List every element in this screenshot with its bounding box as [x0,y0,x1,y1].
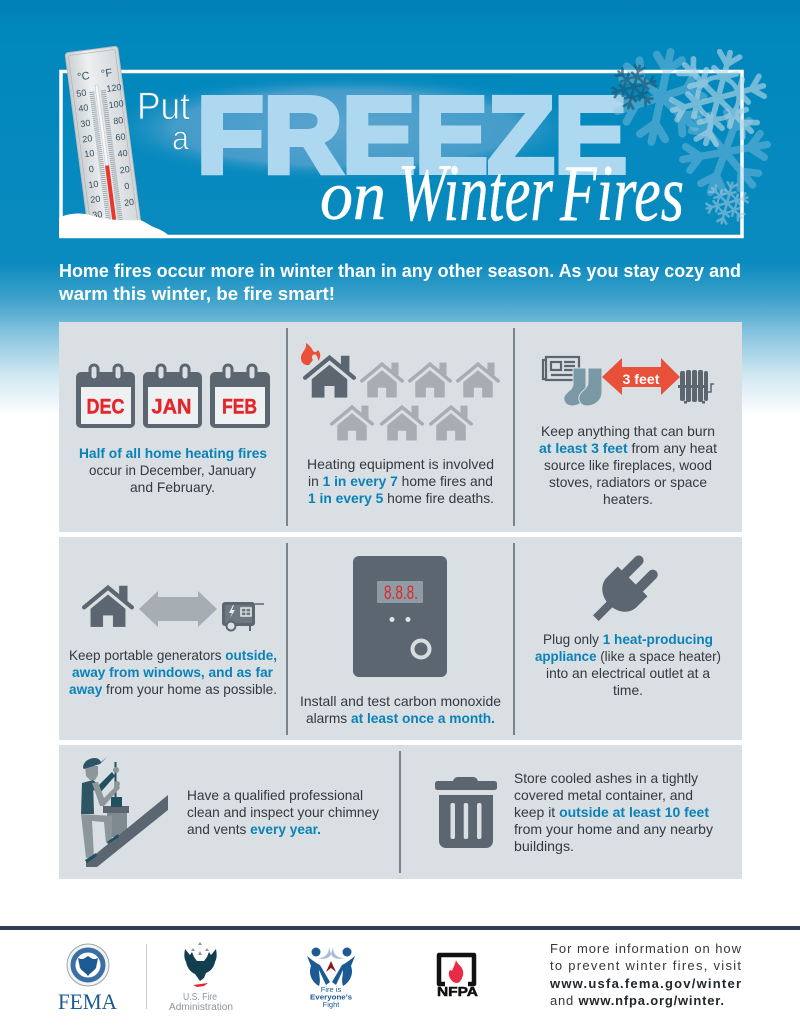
text: CO alarms: alarms at least once a month. [306,710,495,726]
text: plug: Plug only 1 heat-producing [543,631,713,647]
text: generators: Keep portable generators outside, [69,647,277,663]
logo: FEMA: FEMA [58,989,117,1014]
icon: calendars [76,365,270,428]
title: Put a: Put [137,86,190,128]
legs [81,814,112,858]
logo: U.S. Fire Administration: Administration [169,1002,233,1013]
title: Put a [137,86,190,158]
brush [114,762,116,802]
logo: FEMA [58,944,117,1014]
logo: Fire is Everyone's Fight: Everyone's [310,992,352,1002]
icon: calendars: FEB [222,396,257,418]
icon: calendars: DEC [86,396,124,418]
icon: thermometer: 20 [123,197,135,208]
text: ashes: Store cooled ashes in a tightly [514,770,698,786]
icon: snowflakes [606,41,780,229]
icon: radiator [678,370,714,404]
icon: thermometer: 0 [88,164,95,174]
intro text: Home fires occur more in winter than in any other season. As you stay cozy and [59,261,741,281]
icon: thermometer: 80 [113,115,124,126]
text: chimney: clean and inspect your chimney [187,804,379,820]
text: keep 3 feet: Keep anything that can burn [541,423,715,439]
text: heating fires [79,445,267,495]
arrow: 3 feet: 3 feet [622,372,660,387]
icon: thermometer: 40 [117,148,128,159]
intro text: warm this winter, be fire smart! [58,284,335,304]
icon: trash can [435,777,497,848]
chimney [107,813,127,837]
logo: Fire is Everyone's Fight: Fight [323,1000,340,1009]
arrow: distance [139,591,217,627]
text: CO alarms [300,693,501,726]
icon: thermometer: 100 [108,98,124,110]
text: heating fires: occur in December, January [89,462,256,478]
icon: thermometer [59,46,168,238]
head [85,766,98,780]
icon: thermometer: 30 [92,209,103,220]
text: keep 3 feet [539,423,717,507]
text: more information: to prevent winter fires, visit [550,958,741,973]
icon: thermometer: 20 [82,133,93,144]
text: CO alarms: Install and test carbon monoxide [300,693,501,709]
arrow: 3 feet [602,358,680,395]
text: plug [535,631,721,698]
icon: thermometer: 20 [90,194,101,205]
panel: row 3 [59,745,742,879]
text: generators: away from your home as possible. [69,681,277,697]
text: keep 3 feet: source like fireplaces, wood [544,457,712,473]
title banner [61,72,742,238]
title glow [100,74,590,182]
icon: CO alarm: 8.8.8. [384,583,418,604]
text: plug: time. [613,682,643,698]
icon: plug [581,550,664,633]
torso [81,780,94,814]
text: ashes [514,770,713,854]
text: more information: www.usfa.fema.gov/winter [549,976,741,991]
arms [93,772,115,793]
text: chimney [187,787,379,837]
text: ashes: keep it outside at least 10 feet [514,804,709,820]
snow [59,214,168,238]
text: ashes: buildings. [514,838,574,854]
text: heating equipment: Heating equipment is involved [307,456,494,472]
icon: thermometer: 20 [119,164,130,175]
roof [86,795,168,867]
logo: U.S. Fire Administration [169,942,233,1013]
icon: CO alarm [353,556,447,677]
logo: U.S. Fire Administration: U.S. Fire [183,992,217,1003]
title: on Winter Fires: on [320,158,386,235]
text: chimney: Have a qualified professional [187,787,363,803]
icon: chimney sweep [81,757,168,867]
title: Put a: a [172,120,189,158]
title: FREEZE: FREEZE [197,74,627,195]
title: on Winter Fires: Winter [398,147,554,238]
text: more information: and www.nfpa.org/winter. [550,993,724,1008]
text: keep 3 feet: stoves, radiators or space [549,474,707,490]
icon: thermometer: 60 [115,131,126,143]
title: on Winter Fires: Fires [559,150,684,238]
intro text [58,261,741,304]
panel: row 1 [59,322,742,532]
icon: thermometer: 0 [124,181,130,191]
logo: Fire is Everyone's Fight [307,947,355,1009]
text: heating fires: Half of all home heating fires [79,445,267,461]
text: heating equipment: 1 in every 5 home fire deaths. [308,490,494,506]
background gradient [0,0,800,416]
icon: house [84,586,132,627]
text: chimney: and vents every year. [187,821,321,837]
icon: thermometer: 30 [80,118,91,129]
text: heating equipment: in 1 in every 7 home fires and [308,473,493,489]
icon: thermometer: 120 [106,82,122,94]
title frame [61,72,742,236]
text: plug: appliance (like a space heater) [535,648,721,664]
text: ashes: from your home and any nearby [514,821,713,837]
text: keep 3 feet: heaters. [603,491,653,507]
icon: thermometer: 10 [88,179,99,190]
text: ashes: covered metal container, and [514,787,693,803]
title: on Winter Fires [320,147,684,238]
tube [95,85,117,230]
icon: thermometer: 10 [84,148,95,159]
text: plug: into an electrical outlet at a [546,665,710,681]
text: generators [69,647,277,697]
logo: NFPA [437,955,478,999]
text: generators: away from windows, and as far [72,664,274,680]
text: keep 3 feet: at least 3 feet from any heat [539,440,717,456]
icon: houses [301,343,498,440]
icon: newspaper and socks [543,357,602,406]
text: more information [549,941,742,1008]
text: heating fires: and February. [130,479,215,495]
scale ticks [92,92,110,229]
icon: thermometer: 40 [78,102,89,114]
divider [146,944,147,1009]
panel: row 2 [59,537,742,740]
text: heating equipment [307,456,494,506]
logo: Fire is Everyone's Fight: Fire is [321,985,341,994]
icon: thermometer: 50 [76,88,87,99]
icon: thermometer: °F [100,67,113,80]
logo: NFPA: NFPA [437,985,478,999]
footer rule [0,926,800,930]
icon: generator [222,602,264,631]
icon: thermometer: °C [77,70,90,84]
text: more information: For more information on how [550,941,742,956]
icon: calendars: JAN [152,396,192,418]
